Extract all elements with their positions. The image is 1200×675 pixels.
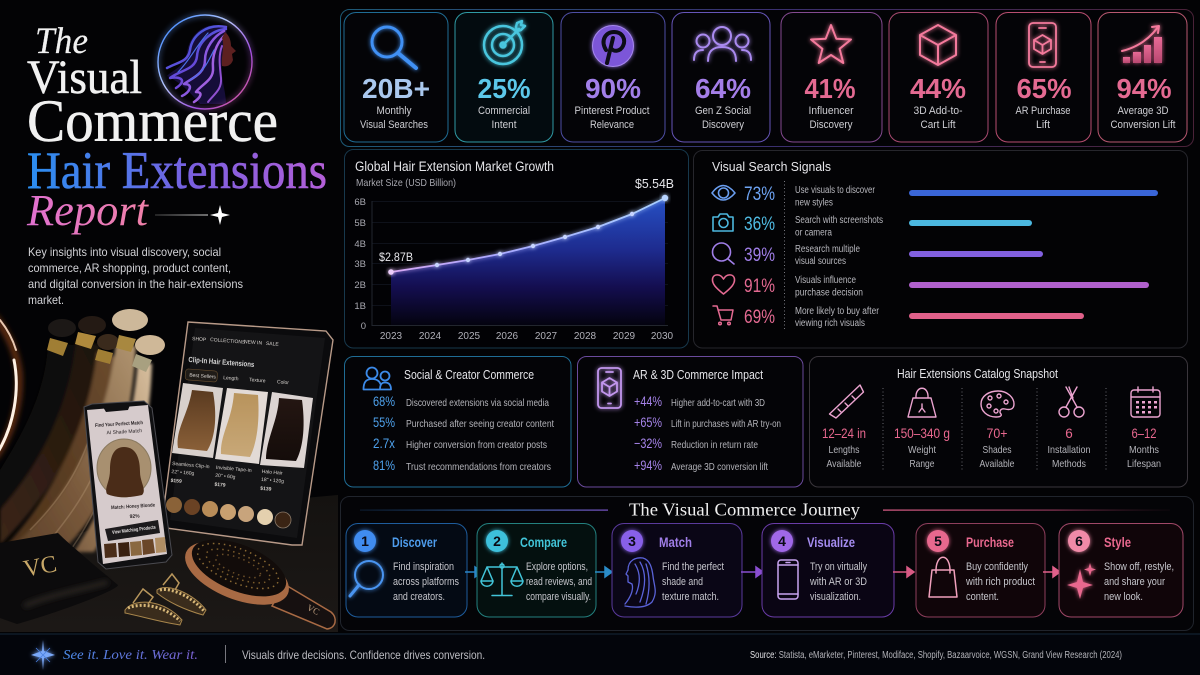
AR metrics: −32%	[634, 435, 662, 451]
phone: View Matching Products	[112, 525, 156, 536]
catalog: lengths: Available	[826, 458, 862, 470]
catalog: lengths: Lengths	[828, 444, 860, 456]
catalog: shades: 70+	[986, 426, 1008, 441]
y axis	[354, 197, 668, 332]
catalog: shades: Available	[980, 458, 1015, 470]
social metrics: 81%	[373, 457, 395, 473]
catalog: lifespan: Lifespan	[1127, 458, 1161, 470]
phone	[84, 401, 172, 569]
step 6: style: new look.	[1104, 591, 1143, 603]
table surface	[0, 495, 338, 632]
icon: glowing hair logo	[158, 15, 252, 109]
catalog heading: Hair Extensions Catalog Snapshot	[897, 367, 1058, 381]
signal: 36%: Search with screenshots	[795, 215, 883, 226]
hair brush	[185, 540, 336, 630]
panel: visual commerce journey	[340, 496, 1194, 630]
stat card: 41%: Discovery	[810, 119, 853, 131]
AR metrics: Lift in purchases with AR try-on	[671, 418, 781, 430]
y axis: 1B	[354, 301, 366, 312]
stat card: 20B+: 20B+	[362, 73, 430, 104]
hair bundles	[0, 309, 165, 552]
AR metrics: +44%	[634, 393, 662, 409]
signal: 36%: or camera	[795, 228, 832, 238]
x axis labels: 2025	[458, 331, 481, 342]
product photo scene	[0, 309, 338, 632]
panel: visual search signals	[694, 150, 1188, 348]
stat card: 25%: Commercial	[478, 105, 530, 117]
social metrics: Discovered extensions via social media	[406, 397, 549, 409]
arrow: 5 to 6	[1043, 567, 1060, 577]
signal: 69%: viewing rich visuals	[795, 318, 865, 329]
social metrics: Purchased after seeing creator content	[406, 418, 554, 430]
tablet: Texture	[249, 377, 266, 384]
step 6: style: Style	[1104, 535, 1131, 550]
step 5: purchase: Purchase	[966, 535, 1014, 550]
step 4: visualize: visualization.	[810, 591, 861, 603]
y axis: 0	[361, 321, 366, 332]
signal: 73%	[712, 184, 1158, 208]
stat card: 41%	[781, 12, 882, 142]
tagline: See it. Love it. Wear it.	[63, 648, 198, 663]
step 6: style	[1059, 524, 1183, 617]
social metrics	[373, 393, 554, 473]
signal: 36%: 36%	[744, 214, 775, 235]
x axis labels: 2023	[380, 331, 403, 342]
signal: 91%: 91%	[744, 276, 775, 297]
stat card: 41%: Influencer	[808, 105, 854, 117]
tablet: NEW IN	[244, 339, 263, 347]
step 2: compare: Explore options,	[526, 561, 588, 573]
step 2: compare	[477, 524, 596, 617]
step 4: visualize: Visualize	[807, 535, 855, 550]
x axis labels: 2027	[535, 331, 558, 342]
signal: 73%: 73%	[744, 184, 775, 205]
step 2: compare: 2	[493, 533, 501, 549]
x axis labels: 2024	[419, 331, 442, 342]
step 6: style: 6	[1075, 533, 1083, 549]
tablet: $179	[214, 482, 226, 489]
stat card: 65%: Lift	[1036, 119, 1050, 131]
step 4: visualize: 4	[778, 533, 786, 549]
catalog: installation	[1048, 387, 1091, 470]
arrow: 4 to 5	[893, 567, 914, 577]
step 3: match: shade and	[662, 576, 703, 588]
catalog: installation: Installation	[1048, 444, 1091, 456]
stat card: 90%: 90%	[585, 73, 641, 104]
step 5: purchase: Buy confidently	[966, 561, 1028, 573]
tablet: Length	[223, 375, 239, 382]
stat card: 44%: Cart Lift	[920, 119, 956, 131]
intro text	[28, 245, 243, 307]
signal: 73%: new styles	[795, 198, 833, 208]
tablet: SALE	[266, 341, 280, 348]
phone: 92%	[130, 513, 140, 520]
tablet: Clip-In Hair Extensions	[188, 355, 255, 369]
stat card: 90%: Relevance	[590, 119, 634, 131]
area and line	[388, 195, 668, 325]
step 3: match: 3	[628, 533, 636, 549]
signal: 39%	[712, 243, 1043, 267]
panel: stats row	[340, 10, 1194, 146]
footer bar	[0, 634, 1200, 675]
signal: 69%: More likely to buy after	[795, 306, 880, 317]
AR metrics: +94%	[634, 457, 662, 473]
stat card: 90%	[561, 12, 665, 142]
data labels: $2.87B	[379, 250, 413, 264]
AR heading: AR & 3D Commerce Impact	[633, 367, 763, 382]
social metrics: 68%	[373, 393, 395, 409]
y axis: 5B	[354, 218, 366, 229]
step 2: compare: Compare	[520, 535, 567, 550]
tablet: 18" • 120g	[261, 477, 284, 485]
stat card: 64%	[672, 12, 770, 142]
arrow: 3 to 4	[741, 567, 763, 577]
signal: 91%: Visuals influence	[795, 275, 856, 286]
stat card: 94%: Conversion Lift	[1110, 119, 1176, 131]
catalog: lengths: 12–24 in	[822, 426, 866, 441]
panel: social and creator commerce	[344, 356, 571, 487]
data labels: $5.54B	[635, 176, 674, 191]
tablet: 20" • 60g	[215, 473, 236, 481]
chart subtitle: Market Size (USD Billion)	[356, 177, 456, 189]
panel: market growth chart	[344, 150, 688, 348]
catalog: shades	[980, 391, 1015, 470]
catalog: weight	[894, 388, 950, 470]
social metrics: 2.7x	[373, 435, 395, 451]
AR metrics: +65%	[634, 414, 662, 430]
signal: 73%: Use visuals to discover	[795, 185, 876, 196]
tablet: $159	[170, 478, 182, 485]
stat card: 64%: 64%	[695, 73, 751, 104]
title: The Visual Commerce	[27, 21, 278, 154]
step 3: match: texture match.	[662, 591, 719, 603]
ring light	[0, 318, 19, 456]
step 1: discover	[346, 524, 467, 617]
footer message: Visuals drive decisions. Confidence drives conversion.	[242, 648, 485, 662]
signals heading: Visual Search Signals	[712, 159, 831, 174]
tablet: COLLECTIONS	[210, 337, 246, 346]
y axis: 3B	[354, 259, 366, 270]
catalog: weight: Weight	[908, 444, 936, 456]
step 2: compare: read reviews, and	[526, 576, 592, 588]
signal: 69%: 69%	[744, 307, 775, 328]
tablet: Color	[277, 379, 289, 386]
x axis labels: 2030	[651, 331, 674, 342]
panel: catalog snapshot	[810, 356, 1188, 487]
signal: 91%	[712, 275, 1149, 298]
tablet: Invisible Tape-in	[216, 465, 252, 474]
velvet pouch	[0, 533, 118, 624]
catalog: shades: Shades	[982, 444, 1012, 456]
stat card: 90%: Pinterest Product	[574, 105, 650, 117]
stat card: 64%: Discovery	[702, 119, 744, 131]
stat card: 65%: 65%	[1016, 73, 1072, 104]
stat card: 44%: 3D Add-to-	[914, 105, 963, 117]
catalog: weight: Range	[910, 458, 935, 470]
step 2: compare: compare visually.	[526, 591, 591, 603]
social heading: Social & Creator Commerce	[404, 367, 534, 382]
x axis labels: 2028	[574, 331, 597, 342]
tablet: 22" • 160g	[171, 469, 195, 477]
stat card: 25%: Intent	[492, 119, 516, 131]
tablet: $139	[260, 486, 272, 493]
signal: 69%	[713, 306, 1084, 329]
x axis labels: 2029	[613, 331, 636, 342]
social metrics: Trust recommendations from creators	[406, 461, 551, 473]
catalog: lifespan	[1127, 387, 1161, 470]
step 1: discover: Discover	[392, 535, 438, 550]
step 1: discover: and creators.	[393, 591, 445, 603]
title: The Visual Commerce: Visual	[27, 51, 142, 104]
step 4: visualize: Try on virtually	[810, 561, 867, 573]
stat card: 65%	[996, 12, 1091, 142]
intro text: market.	[28, 293, 64, 307]
title: The Visual Commerce: Commerce	[27, 88, 278, 154]
stat card: 64%: Gen Z Social	[695, 105, 751, 117]
icon: blue star	[31, 640, 55, 670]
AR metrics: Reduction in return rate	[671, 439, 758, 451]
AR metrics	[634, 393, 781, 473]
step 6: style: Show off, restyle,	[1104, 561, 1174, 573]
step 5: purchase: content.	[966, 591, 999, 603]
step 5: purchase	[916, 524, 1045, 617]
stat card: 44%: 44%	[910, 73, 966, 104]
catalog: installation: 6	[1065, 426, 1073, 441]
step 4: visualize	[762, 524, 894, 617]
catalog: lengths	[822, 385, 866, 470]
y axis: 6B	[354, 197, 366, 208]
signal: 91%: purchase decision	[795, 288, 863, 298]
step 4: visualize: with AR or 3D	[809, 576, 867, 588]
step 5: purchase: 5	[934, 533, 942, 549]
chart heading: Global Hair Extension Market Growth	[355, 159, 554, 174]
stat card: 25%	[455, 12, 553, 142]
tablet: Seamless Clip-in	[172, 461, 210, 470]
title: The Visual Commerce: The	[35, 21, 88, 62]
title: Report script: Report	[26, 186, 150, 235]
signal: 36%	[713, 214, 1032, 238]
stat card: 94%: Average 3D	[1118, 105, 1169, 117]
y axis: 2B	[354, 280, 366, 291]
intro text: Key insights into visual discovery, social	[28, 245, 221, 259]
arrow: 1 to 2	[465, 567, 482, 577]
tablet: Best Sellers	[189, 373, 217, 381]
signal: 39%: 39%	[744, 245, 775, 266]
phone: Match: Honey Blonde	[111, 502, 155, 511]
catalog: lifespan: 6–12	[1132, 426, 1156, 441]
tablet: SHOP	[192, 336, 207, 343]
step 1: discover: Find inspiration	[393, 561, 454, 573]
stat card: 20B+: Monthly	[376, 105, 412, 117]
phone: Find Your Perfect Match	[95, 420, 143, 429]
step 3: match: Match	[659, 535, 692, 550]
tablet: Halo Hair	[261, 469, 283, 477]
step 1: discover: 1	[361, 533, 369, 549]
stat card: 44%	[889, 12, 988, 142]
hair clips	[125, 574, 206, 625]
step 5: purchase: with rich product	[965, 576, 1035, 588]
intro text: commerce, AR shopping, product content,	[28, 261, 231, 275]
x axis labels: 2026	[496, 331, 519, 342]
catalog: installation: Methods	[1052, 458, 1086, 470]
left column header	[26, 15, 327, 307]
intro text: and digital conversion in the hair-extensions	[28, 277, 243, 291]
stat card: 65%: AR Purchase	[1016, 105, 1070, 117]
step 1: discover: across platforms	[393, 576, 459, 588]
step 3: match	[612, 524, 742, 617]
social metrics: 55%	[373, 414, 395, 430]
phone: AI Shade Match	[106, 428, 142, 436]
y axis: 4B	[354, 239, 366, 250]
step 3: match: Find the perfect	[662, 561, 724, 573]
icon: people	[364, 368, 391, 390]
AR metrics: Average 3D conversion lift	[671, 461, 768, 473]
title: Hair Extensions: Hair Extensions	[27, 142, 327, 200]
signal: 39%: visual sources	[795, 256, 846, 267]
velvet pouch: VC	[21, 551, 59, 583]
data labels	[379, 176, 674, 264]
x axis labels	[380, 331, 674, 342]
stat card: 20B+	[344, 12, 448, 142]
step 6: style: and share your	[1104, 576, 1165, 588]
AR metrics: Higher add-to-cart with 3D	[671, 397, 765, 409]
stat card: 41%: 41%	[804, 73, 856, 104]
catalog: weight: 150–340 g	[894, 426, 950, 441]
tablet	[162, 322, 333, 545]
catalog: lifespan: Months	[1129, 444, 1159, 456]
social metrics: Higher conversion from creator posts	[406, 439, 547, 451]
sparkle divider	[155, 205, 230, 225]
stat card: 20B+: Visual Searches	[360, 119, 428, 131]
arrow: 2 to 3	[595, 567, 612, 577]
panel: AR and 3D commerce impact	[578, 356, 803, 487]
stat card: 25%: 25%	[478, 73, 531, 104]
signal: 39%: Research multiple	[795, 244, 860, 255]
hair brush: VC	[305, 602, 321, 617]
stat card: 94%: 94%	[1116, 73, 1172, 104]
journey heading: The Visual Commerce Journey	[629, 500, 860, 520]
stat card: 94%	[1098, 12, 1187, 142]
icon: AR phone	[598, 368, 621, 408]
